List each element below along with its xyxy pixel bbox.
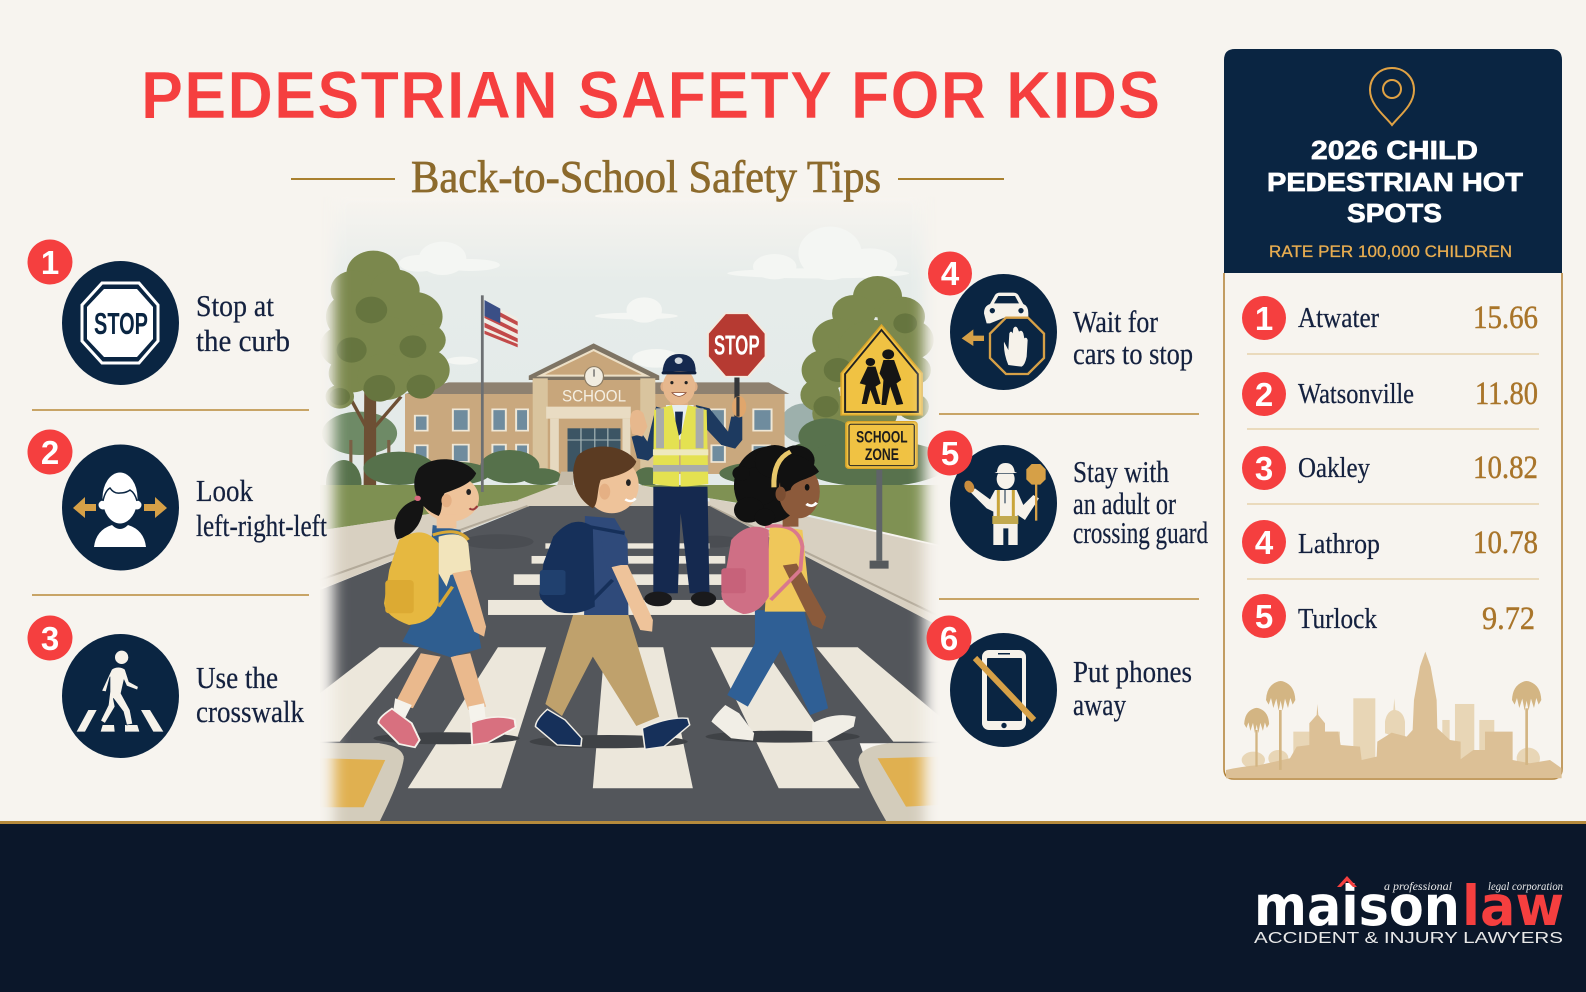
right tree (800, 276, 934, 424)
footer band (0, 821, 1586, 992)
icon: location pin (1370, 68, 1414, 125)
badge 1 (28, 240, 72, 284)
row 1: Atwater: 1 (1255, 300, 1273, 337)
tip text: Put phones (1073, 654, 1192, 689)
tip text: cars to stop (1073, 336, 1193, 371)
tip text: left-right-left (196, 508, 327, 543)
row 4: Lathrop: 4 (1255, 524, 1274, 561)
row 2: Watsonville: 11.80 (1475, 376, 1538, 412)
subtitle with rules: Back-to-School Safety Tips (411, 151, 881, 202)
title: PEDESTRIAN SAFETY FOR KIDS (141, 57, 1161, 132)
boy with navy backpack (535, 447, 690, 749)
row 5: Turlock: 5 (1255, 598, 1273, 635)
icon: head with arrows (62, 444, 179, 570)
logo: a professional (1384, 879, 1453, 893)
badge 5 (928, 430, 972, 476)
row 1: Atwater: 15.66 (1473, 300, 1538, 336)
icon: walker on crosswalk (62, 634, 179, 758)
guard stop paddle: STOP (714, 329, 760, 361)
badge 6: 6 (940, 620, 958, 657)
lawns, sidewalks and road (320, 472, 940, 830)
school label: SCHOOL (562, 386, 626, 405)
badge 5: 5 (941, 435, 959, 472)
row 1: Atwater: Atwater (1298, 302, 1379, 334)
panel heading (1267, 135, 1523, 228)
school zone sign: ZONE (865, 444, 899, 464)
logo: legal corporation (1488, 879, 1563, 893)
row 3: Oakley (1242, 446, 1538, 490)
left tree (323, 250, 450, 485)
badge 4: 4 (941, 255, 960, 292)
badge 4 (928, 251, 972, 296)
logo (1254, 874, 1564, 947)
row 5: Turlock: 9.72 (1482, 601, 1535, 637)
distant hills and trees (324, 404, 814, 463)
panel subheading: RATE PER 100,000 CHILDREN (1269, 242, 1512, 261)
flagpole and flag (481, 295, 518, 492)
badge 1: 1 (41, 244, 59, 281)
icon: stop sign: STOP (94, 306, 148, 341)
badge 3 (28, 616, 72, 660)
sign post (870, 470, 889, 569)
tip text: the curb (196, 323, 290, 358)
tip 4: wait for cars to stop (928, 251, 1193, 390)
school zone sign: SCHOOL (856, 427, 908, 446)
tip 2: look left-right-left (28, 430, 327, 570)
illustration: school crossing scene (323, 238, 935, 821)
palm trees (1244, 681, 1541, 770)
clouds (400, 253, 909, 368)
skyline (1226, 652, 1562, 778)
logo: ACCIDENT & INJURY LAWYERS (1254, 930, 1563, 947)
icon: car and hand (950, 274, 1057, 390)
bushes and hedges (326, 418, 935, 486)
tip 6: put phones away (926, 616, 1192, 747)
logo: law (1462, 874, 1564, 938)
tip 1: stop at the curb (28, 240, 290, 385)
badge 2 (28, 430, 72, 474)
row 4: Lathrop: Lathrop (1298, 528, 1380, 560)
tip text: Use the (196, 660, 278, 695)
shadows (373, 731, 860, 748)
icon: crossing guard (950, 445, 1057, 561)
tip text: Wait for (1073, 304, 1159, 339)
school zone sign (846, 422, 917, 468)
curbs with tactile pads (323, 743, 935, 821)
tip text: crosswalk (196, 694, 304, 729)
row 2: Watsonville: Watsonville (1298, 378, 1414, 410)
row 2: Watsonville: 2 (1255, 376, 1273, 413)
row 3: Oakley: Oakley (1298, 452, 1370, 484)
girl with pink backpack (711, 445, 856, 742)
badge 2: 2 (41, 434, 59, 471)
tip text: Stop at (196, 288, 274, 323)
tip text: away (1073, 687, 1126, 722)
icon: stop sign (62, 261, 179, 385)
panel heading: 2026 CHILD (1311, 135, 1478, 165)
crossing guard (630, 313, 766, 606)
badge 3: 3 (41, 620, 59, 657)
row 3: Oakley: 3 (1255, 450, 1273, 487)
row 5: Turlock (1242, 594, 1535, 638)
panel heading: SPOTS (1347, 198, 1442, 228)
school crossing sign (841, 325, 922, 415)
guard stop paddle (707, 312, 766, 417)
row 4: Lathrop (1242, 520, 1538, 564)
row 4: Lathrop: 10.78 (1473, 525, 1538, 561)
panel heading: PEDESTRIAN HOT (1267, 167, 1523, 197)
tip 3: use the crosswalk (28, 616, 304, 758)
crosswalk stripes (320, 543, 940, 788)
tip 5: stay with an adult (928, 430, 1208, 561)
row 1: Atwater (1242, 296, 1538, 340)
badge 6 (926, 616, 972, 660)
icon: crossed-out phone (950, 633, 1057, 747)
row 2: Watsonville (1242, 372, 1538, 416)
tip text: Stay with (1073, 454, 1169, 489)
tip text: crossing guard (1073, 515, 1208, 550)
panel header (1224, 49, 1562, 273)
logo: maison (1254, 874, 1460, 938)
tip text: Look (196, 473, 253, 508)
row 5: Turlock: Turlock (1298, 603, 1377, 635)
tip text: an adult or (1073, 486, 1177, 521)
girl with yellow backpack (378, 459, 516, 747)
row 3: Oakley: 10.82 (1473, 450, 1538, 486)
school building (405, 343, 789, 474)
panel: hot spots (1224, 49, 1562, 779)
